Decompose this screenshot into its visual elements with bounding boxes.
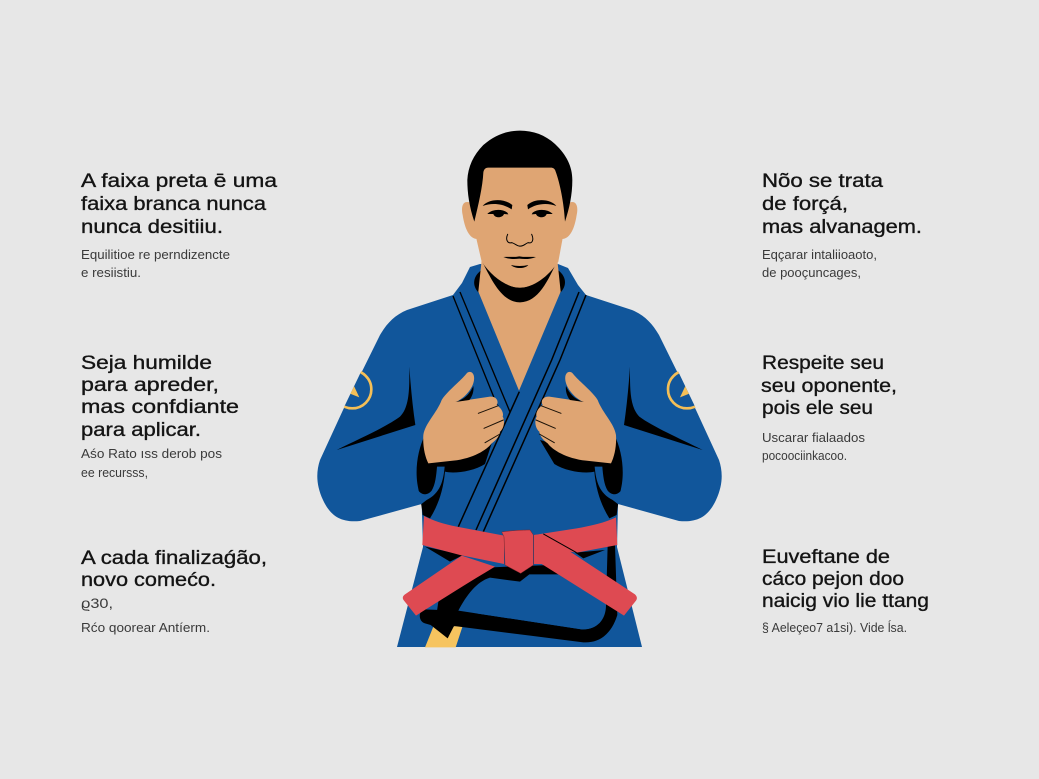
heading: Seja humilde bbox=[81, 352, 212, 374]
belt fold line bbox=[543, 534, 577, 553]
heading: mas confdiante bbox=[81, 396, 239, 418]
heading bbox=[81, 547, 267, 591]
body text: de pooçuncages, bbox=[762, 266, 861, 280]
left lapel stripes bbox=[453, 292, 510, 412]
neck shadow at the collar bbox=[474, 271, 565, 292]
heading: A cada finalizaǵão, bbox=[81, 547, 267, 569]
heading: Euveftane de bbox=[762, 546, 890, 568]
left hand bbox=[423, 372, 504, 463]
left belt tail bbox=[403, 556, 495, 616]
nose bbox=[507, 234, 533, 246]
heading bbox=[81, 352, 239, 441]
text block: left 1 bbox=[81, 170, 277, 280]
text block: right 1 bbox=[762, 170, 922, 280]
right lapel band crossing bbox=[458, 360, 563, 532]
eyebrows bbox=[483, 200, 556, 209]
blue panel inside the belt loop bbox=[458, 574, 606, 629]
heading: novo comećo. bbox=[81, 569, 216, 591]
right hand bbox=[535, 372, 616, 463]
mouth bbox=[503, 256, 536, 268]
heading: faixa branca nunca bbox=[81, 193, 266, 215]
heading: de forçá, bbox=[762, 193, 848, 215]
right cuff bbox=[595, 467, 621, 504]
text block: left 2 bbox=[81, 352, 239, 480]
body text: ϱ30, bbox=[81, 595, 113, 611]
text block: right 3 bbox=[762, 546, 929, 635]
eyes bbox=[487, 210, 553, 217]
yellow belt end bbox=[425, 626, 463, 647]
upper arms, lapels and patches bbox=[333, 292, 706, 532]
right lapel stripes bbox=[458, 292, 586, 532]
body text: Eqçarar intaliioaoto, bbox=[762, 248, 877, 262]
heading bbox=[762, 546, 929, 612]
heading: mas alvanagem. bbox=[762, 216, 922, 238]
underarm shadows bbox=[417, 435, 492, 518]
right belt tail bbox=[534, 534, 637, 616]
right sleeve patch bbox=[666, 371, 696, 410]
body text: § Aeleçeo7 a1si). Vide ĺsa. bbox=[762, 620, 907, 635]
black belt loop bbox=[420, 545, 617, 642]
heading: pois ele seu bbox=[762, 397, 873, 419]
heading: para aplicar. bbox=[81, 419, 201, 441]
gi jacket body and sleeves bbox=[317, 264, 722, 647]
heading: para apreder, bbox=[81, 374, 219, 396]
head and neck bbox=[462, 131, 577, 391]
left belt band bbox=[422, 516, 504, 564]
left sleeve patch bbox=[344, 371, 373, 410]
heading: Respeite seu bbox=[762, 352, 884, 374]
heading: naicig vio lie ttang bbox=[762, 590, 929, 612]
heading: nunca desitiiu. bbox=[81, 216, 223, 238]
body text bbox=[81, 248, 230, 280]
text block: left 3 bbox=[81, 547, 267, 635]
body text: ee recursss, bbox=[81, 466, 148, 480]
belt knot bbox=[502, 530, 533, 573]
body text bbox=[762, 248, 877, 280]
body text: Equilitioe re perndizencte bbox=[81, 248, 230, 262]
heading bbox=[81, 170, 277, 238]
face bbox=[473, 163, 566, 288]
black area under the knot bbox=[437, 565, 607, 627]
body text bbox=[81, 447, 222, 480]
heading bbox=[761, 352, 897, 419]
neck and chest skin bbox=[478, 260, 561, 391]
belt bbox=[403, 516, 637, 647]
body text: pocoociinkacoo. bbox=[762, 449, 847, 463]
figure: jiu-jitsu athlete bbox=[317, 131, 722, 647]
ears bbox=[462, 202, 577, 239]
body text: e resiistiu. bbox=[81, 266, 141, 280]
body text bbox=[762, 431, 865, 463]
right sleeve fold bbox=[624, 367, 703, 450]
heading: cáco pejon doo bbox=[762, 568, 904, 590]
chin shadow bbox=[482, 261, 557, 302]
body text bbox=[81, 595, 210, 635]
hair bbox=[467, 131, 572, 222]
body text: Aśo Rato ıss derob pos bbox=[81, 447, 222, 461]
heading: seu oponente, bbox=[761, 375, 897, 397]
left cuff bbox=[418, 467, 445, 504]
belt shadows bbox=[425, 547, 605, 562]
text block: right 2 bbox=[761, 352, 897, 463]
heading: Nõo se trata bbox=[762, 170, 883, 192]
right belt band bbox=[534, 517, 617, 553]
left sleeve fold bbox=[337, 367, 415, 450]
body text: Uscarar fialaados bbox=[762, 431, 865, 445]
heading bbox=[762, 170, 922, 238]
body text: Rćo qoorear Antíerm. bbox=[81, 621, 210, 635]
heading: A faixa preta ē uma bbox=[81, 170, 277, 192]
